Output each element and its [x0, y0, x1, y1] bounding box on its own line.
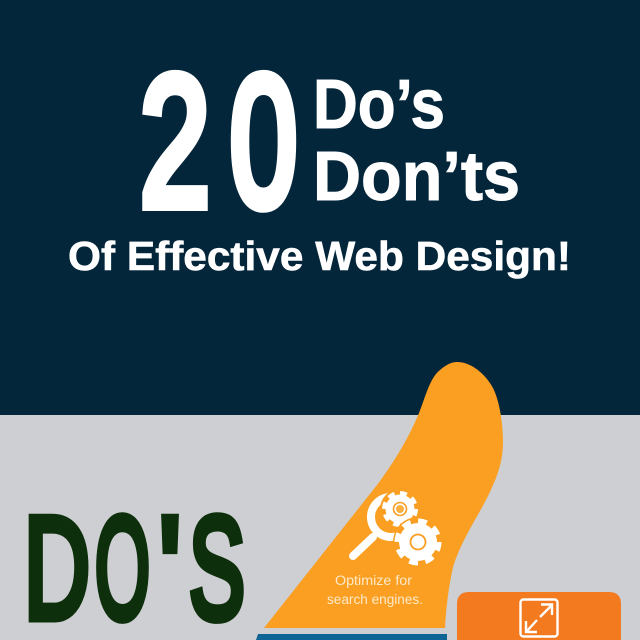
large gear [393, 517, 443, 567]
caption: Optimize for search engines: Optimize for [335, 573, 413, 588]
orange fin panel [264, 362, 503, 628]
title: Don'ts: Don’ts [313, 137, 520, 215]
title number 20: 2 [140, 39, 210, 245]
magnifier handle [353, 537, 373, 556]
subtitle: Of Effective Web Design! [68, 233, 571, 279]
orange panel [457, 592, 621, 640]
small gear [380, 489, 420, 529]
caption: Optimize for search engines: search engines. [327, 592, 423, 607]
icon: expand arrows [520, 600, 558, 636]
title number 20: 0 [230, 39, 297, 245]
header background panel [0, 0, 640, 415]
blue panel top edge [256, 634, 447, 640]
icon: magnifier with gears [353, 489, 443, 567]
title number 20 [140, 39, 297, 245]
heading: DO'S [24, 487, 245, 640]
title: Do's: Do’s [313, 65, 445, 143]
caption: Optimize for search engines [327, 573, 423, 607]
magnifier ring [371, 497, 411, 537]
